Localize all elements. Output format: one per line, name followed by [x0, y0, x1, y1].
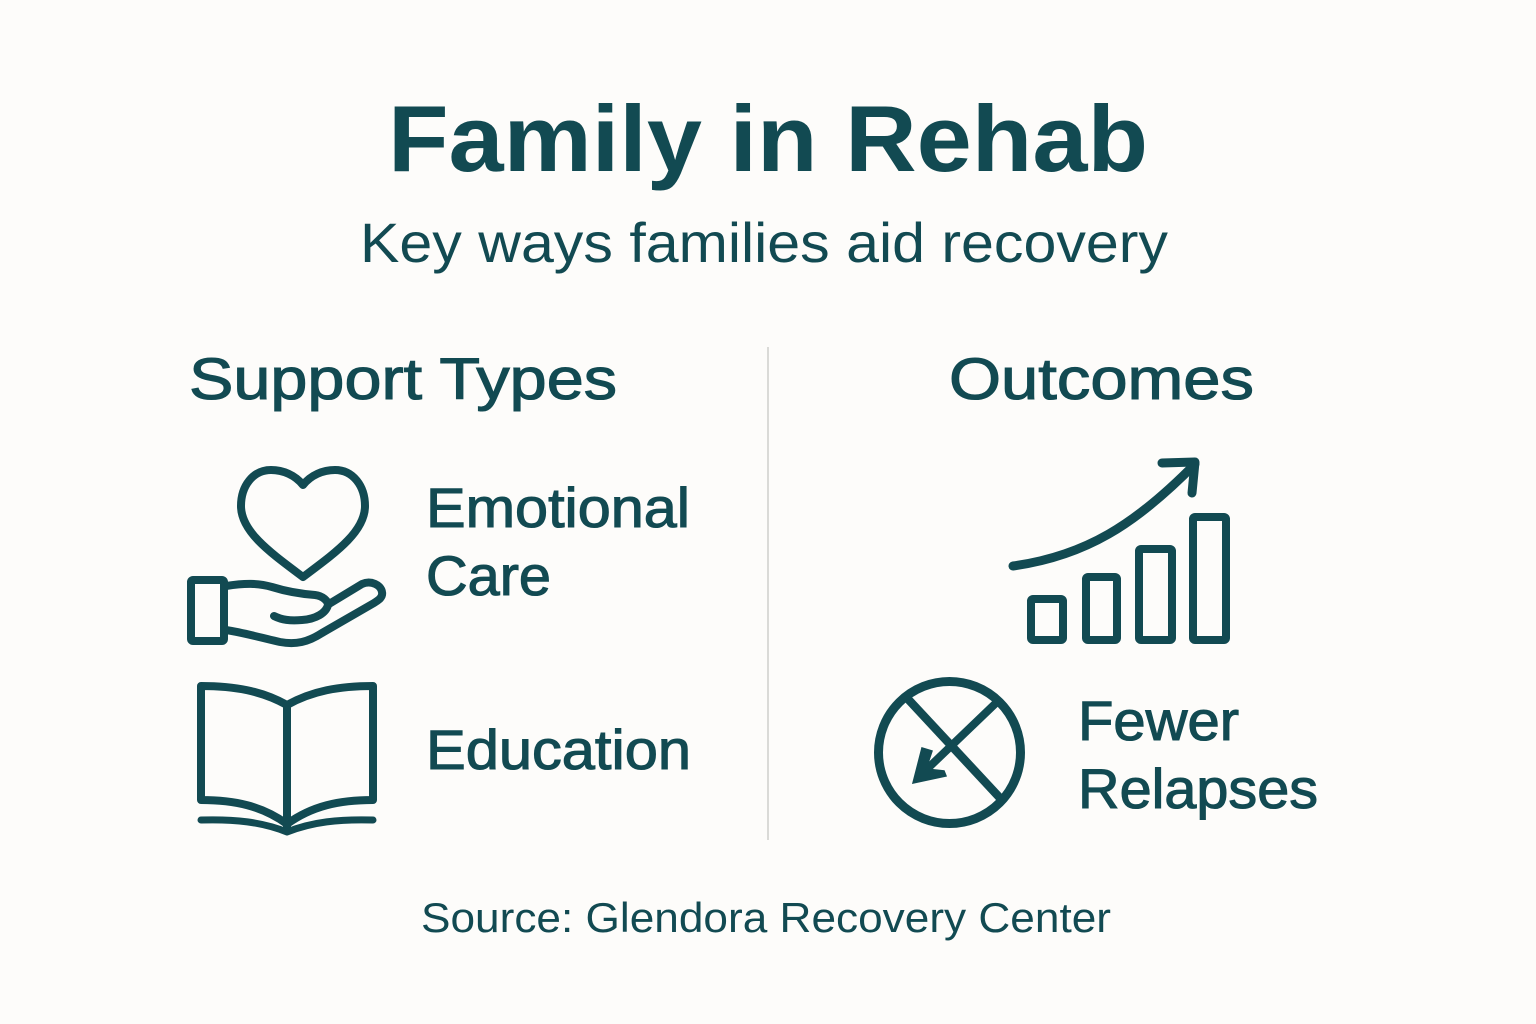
icon: rising bar chart with arrow	[1013, 462, 1226, 640]
panel: outcomes	[878, 347, 1318, 824]
label: emotional care: Emotional	[426, 476, 690, 539]
label: education: Education	[426, 718, 691, 781]
icon: heart in hand	[191, 470, 382, 643]
heading: outcomes: Outcomes	[949, 347, 1254, 412]
label: emotional care: Care	[426, 544, 551, 607]
title: Family in Rehab	[388, 86, 1148, 191]
icon: open book	[201, 686, 373, 832]
label: emotional care	[426, 476, 690, 607]
label: fewer relapses: Fewer	[1078, 689, 1239, 752]
label: fewer relapses: Relapses	[1078, 757, 1318, 820]
label: fewer relapses	[1078, 689, 1318, 820]
subtitle: Key ways families aid recovery	[360, 211, 1168, 274]
icon: circle with crossed line and down arrow	[878, 682, 1020, 824]
panel: support types	[189, 347, 691, 832]
source note: Source: Glendora Recovery Center	[421, 894, 1111, 941]
heading: support types: Support Types	[189, 347, 617, 412]
